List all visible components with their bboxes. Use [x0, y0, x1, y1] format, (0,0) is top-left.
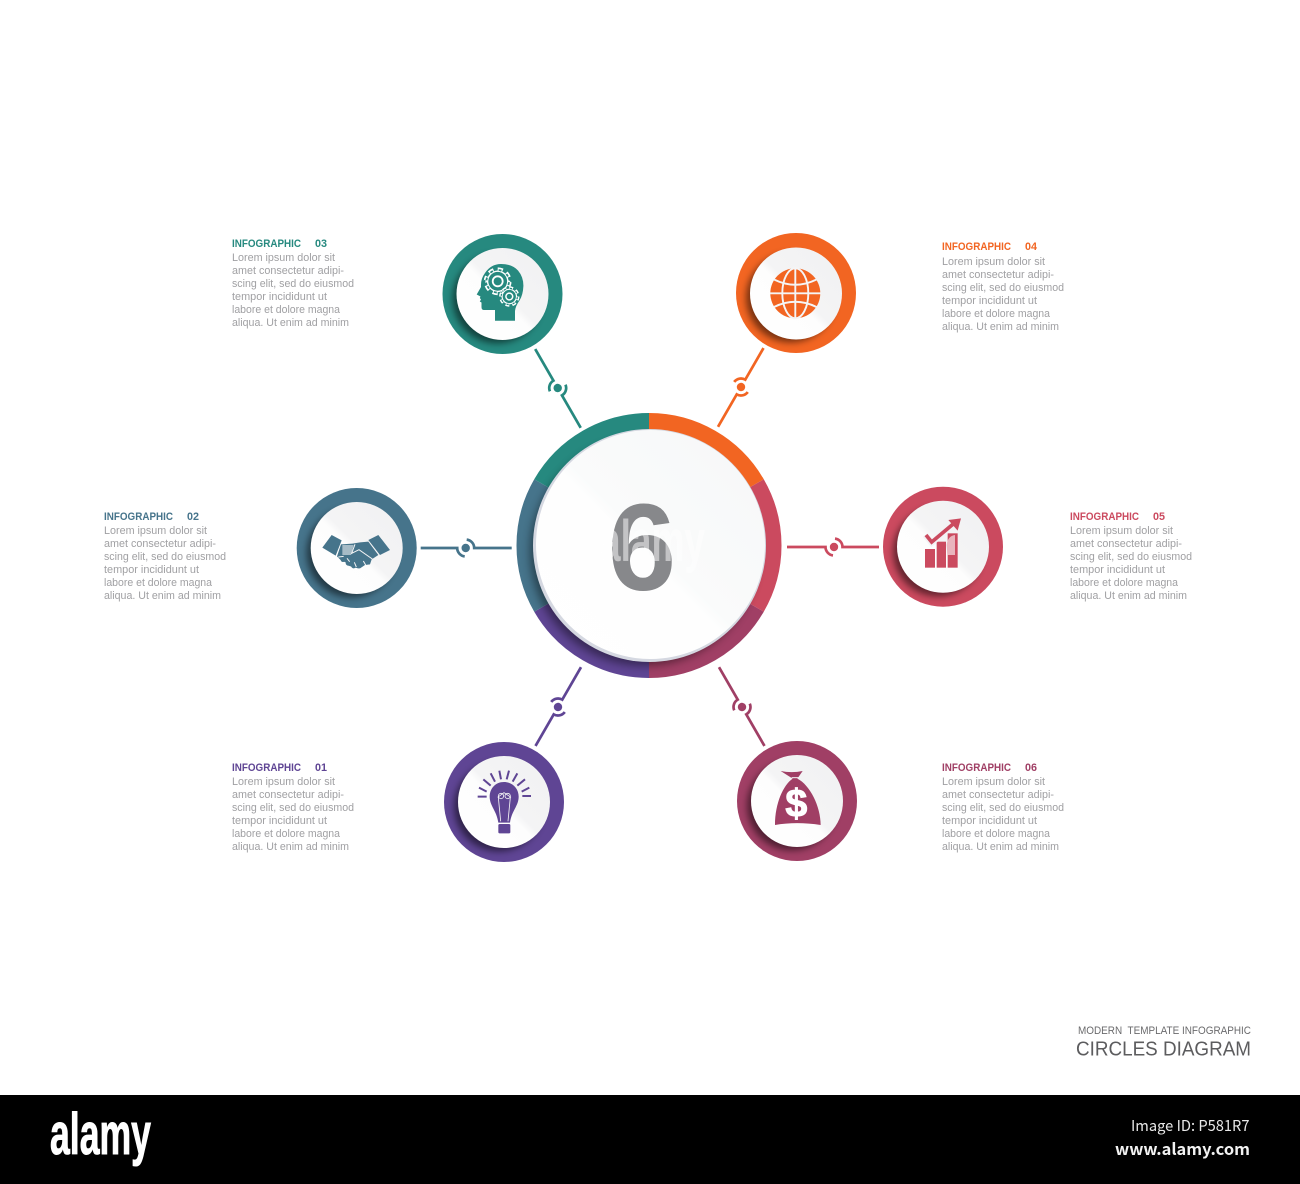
hub ring segments — [525, 422, 773, 670]
body 03: labore et dolore magna — [232, 304, 340, 316]
central hub — [525, 422, 773, 670]
text block 01 — [232, 762, 354, 853]
body 03: Lorem ipsum dolor sit — [232, 252, 335, 264]
node 01: purple circle — [444, 742, 564, 862]
body 02: labore et dolore magna — [104, 577, 212, 589]
node 02: slate circle — [297, 488, 417, 608]
body 03: tempor incididunt ut — [232, 291, 327, 303]
body 01: aliqua. Ut enim ad minim — [232, 841, 349, 853]
text block 05 — [1070, 511, 1192, 602]
body 02 — [104, 525, 226, 602]
body 05: tempor incididunt ut — [1070, 564, 1165, 576]
body 02: tempor incididunt ut — [104, 564, 199, 576]
body 06: tempor incididunt ut — [942, 815, 1037, 827]
footer caption — [1076, 1025, 1251, 1060]
body 05 — [1070, 525, 1192, 602]
body 02: scing elit, sed do eiusmod — [104, 551, 226, 563]
body 01: amet consectetur adipi- — [232, 789, 344, 801]
body 06: labore et dolore magna — [942, 828, 1050, 840]
connector 02 — [421, 540, 512, 556]
connector 05 — [787, 539, 879, 555]
caption line 2: CIRCLES DIAGRAM — [1076, 1038, 1251, 1060]
body 04: amet consectetur adipi- — [942, 269, 1054, 281]
heading 04: INFOGRAPHIC — [942, 241, 1011, 253]
body 01 — [232, 776, 354, 853]
node 03: teal circle — [442, 234, 562, 354]
text block 03 — [232, 238, 354, 329]
body 06: aliqua. Ut enim ad minim — [942, 841, 1059, 853]
heading 02: INFOGRAPHIC — [104, 511, 173, 523]
heading 04: 04 — [1025, 241, 1037, 253]
body 05: Lorem ipsum dolor sit — [1070, 525, 1173, 537]
body 01: Lorem ipsum dolor sit — [232, 776, 335, 788]
body 01: scing elit, sed do eiusmod — [232, 802, 354, 814]
image id: Image ID: P581R7 — [1131, 1115, 1250, 1136]
body 05: labore et dolore magna — [1070, 577, 1178, 589]
body 02: amet consectetur adipi- — [104, 538, 216, 550]
node 04: orange circle — [736, 233, 856, 353]
icon: money bag: $ — [785, 781, 807, 825]
icon: growth chart — [925, 518, 961, 568]
icon: head with gears — [477, 264, 523, 321]
body 06: amet consectetur adipi- — [942, 789, 1054, 801]
connector 04 — [711, 344, 771, 431]
heading 06: 06 — [1025, 762, 1037, 774]
site url: www.alamy.com — [1115, 1136, 1250, 1160]
watermark: alamy — [600, 509, 705, 574]
heading 01: INFOGRAPHIC — [232, 762, 301, 774]
body 04: labore et dolore magna — [942, 308, 1050, 320]
heading 06: INFOGRAPHIC — [942, 762, 1011, 774]
body 03: scing elit, sed do eiusmod — [232, 278, 354, 290]
body 05: scing elit, sed do eiusmod — [1070, 551, 1192, 563]
body 06: scing elit, sed do eiusmod — [942, 802, 1064, 814]
connector 06 — [712, 663, 772, 750]
body 02: Lorem ipsum dolor sit — [104, 525, 207, 537]
heading 05: 05 — [1153, 511, 1165, 523]
body 03 — [232, 252, 354, 329]
connector 01 — [528, 663, 588, 750]
text block 02 — [104, 511, 226, 602]
body 04: Lorem ipsum dolor sit — [942, 256, 1045, 268]
body 03: amet consectetur adipi- — [232, 265, 344, 277]
connector 03 — [528, 345, 588, 432]
body 01: labore et dolore magna — [232, 828, 340, 840]
icon: light bulb — [478, 771, 531, 833]
body 02: aliqua. Ut enim ad minim — [104, 590, 221, 602]
body 01: tempor incididunt ut — [232, 815, 327, 827]
body 04: tempor incididunt ut — [942, 295, 1037, 307]
caption line 1: MODERN TEMPLATE INFOGRAPHIC — [1078, 1025, 1251, 1037]
heading 05: INFOGRAPHIC — [1070, 511, 1139, 523]
body 06: Lorem ipsum dolor sit — [942, 776, 1045, 788]
body 04: aliqua. Ut enim ad minim — [942, 321, 1059, 333]
hub disc — [533, 429, 766, 662]
heading 01: 01 — [315, 762, 327, 774]
heading 02: 02 — [187, 511, 199, 523]
text block 04 — [942, 241, 1064, 333]
body 04: scing elit, sed do eiusmod — [942, 282, 1064, 294]
body 04 — [942, 256, 1064, 333]
heading 03: 03 — [315, 238, 327, 250]
hub number: 6 — [608, 480, 676, 617]
body 05: amet consectetur adipi- — [1070, 538, 1182, 550]
node 06: wine circle — [737, 741, 857, 861]
body 06 — [942, 776, 1064, 853]
body 03: aliqua. Ut enim ad minim — [232, 317, 349, 329]
icon: globe — [770, 268, 820, 318]
icon: handshake — [322, 535, 390, 568]
body 05: aliqua. Ut enim ad minim — [1070, 590, 1187, 602]
watermark footer bar — [0, 1095, 1300, 1184]
heading 03: INFOGRAPHIC — [232, 238, 301, 250]
node 05: red circle — [883, 487, 1003, 607]
alamy logo: alamy — [50, 1102, 151, 1167]
text block 06 — [942, 762, 1064, 853]
